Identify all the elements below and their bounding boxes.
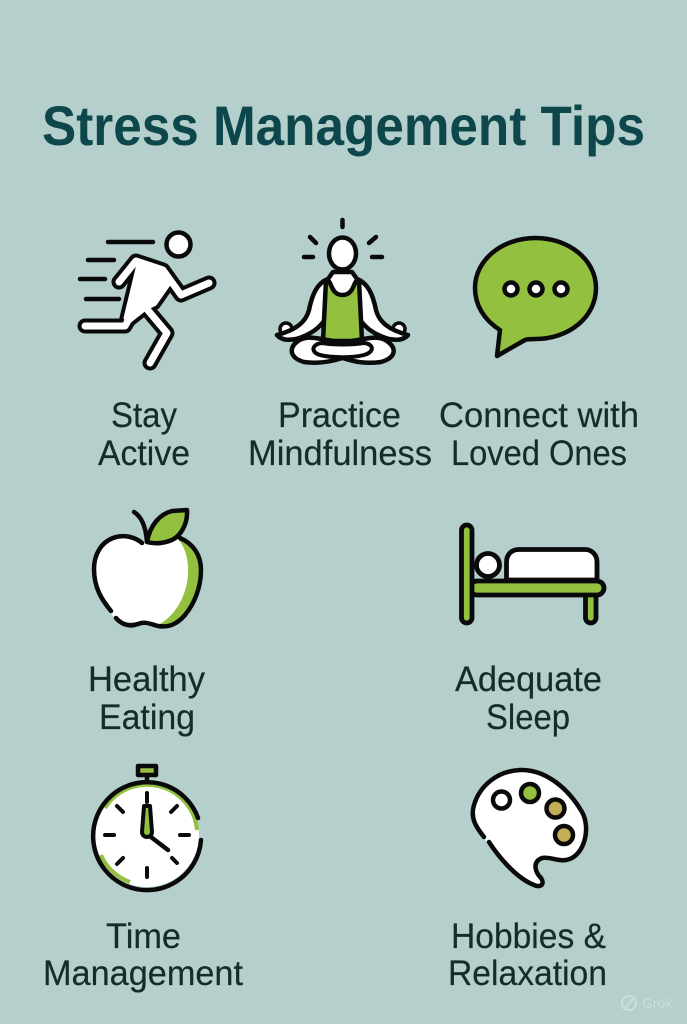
icon: meditating figure — [277, 220, 408, 363]
label: time management: Time — [106, 917, 181, 956]
label: adequate sleep: Sleep — [486, 698, 570, 737]
tip: practice mindfulness — [248, 220, 432, 473]
tip: time management — [43, 766, 243, 993]
icon: paint palette — [473, 770, 586, 886]
label: hobbies and relaxation: Hobbies & — [451, 917, 606, 956]
icon: running figure — [80, 232, 209, 363]
label: stay active — [98, 396, 190, 473]
icon: stopwatch — [93, 766, 201, 890]
label: adequate sleep: Adequate — [455, 660, 602, 699]
label: connect with loved ones: Loved Ones — [451, 434, 627, 473]
label: healthy eating: Eating — [99, 698, 195, 737]
label: stay active: Stay — [111, 396, 177, 435]
label: connect with loved ones — [439, 396, 639, 473]
icon: bed — [462, 525, 604, 623]
label: connect with loved ones: Connect with — [439, 396, 639, 435]
label: adequate sleep — [455, 660, 602, 737]
watermark: Grok — [642, 995, 673, 1011]
tip: connect with loved ones — [439, 238, 639, 473]
label: stay active: Active — [98, 434, 190, 473]
label: time management — [43, 917, 243, 993]
tip: healthy eating — [88, 510, 205, 737]
label: hobbies and relaxation — [448, 917, 607, 993]
label: practice mindfulness: Practice — [278, 396, 401, 435]
label: healthy eating — [88, 660, 205, 737]
label: hobbies and relaxation: Relaxation — [448, 954, 607, 993]
label: healthy eating: Healthy — [88, 660, 205, 699]
watermark — [622, 995, 673, 1011]
label: practice mindfulness — [248, 396, 432, 473]
tip: adequate sleep — [455, 525, 604, 737]
label: practice mindfulness: Mindfulness — [248, 434, 432, 473]
tip: hobbies and relaxation — [448, 770, 607, 993]
tip: stay active — [80, 232, 209, 473]
title: Stress Management Tips — [42, 94, 645, 157]
icon: apple — [94, 510, 201, 626]
icon: speech bubble — [475, 238, 596, 356]
label: time management: Management — [43, 954, 243, 993]
